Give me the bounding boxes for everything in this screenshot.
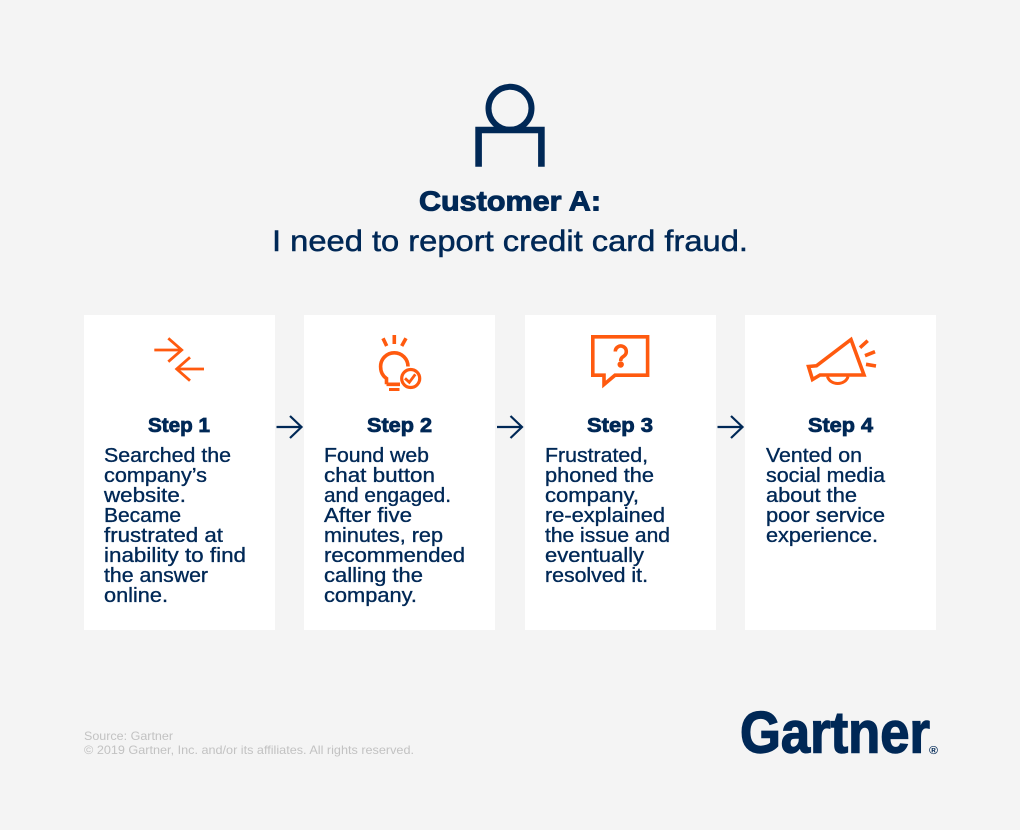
icon: megaphone <box>808 340 876 384</box>
step 4 heading: Step 4 <box>808 415 874 437</box>
step 2 heading: Step 2 <box>367 415 432 437</box>
icon: customer person <box>479 87 541 167</box>
step 1 description: Became <box>104 505 181 527</box>
step 1 description <box>103 445 246 607</box>
Gartner logo: ® <box>929 745 938 757</box>
step 2 description: minutes, rep <box>324 525 443 547</box>
step 3 description: resolved it. <box>545 565 648 587</box>
step 4 description <box>766 445 886 547</box>
source and copyright: © 2019 Gartner, Inc. and/or its affiliates. All rights reserved. <box>84 743 414 757</box>
step 4 description: social media <box>766 465 886 487</box>
arrow: step 3 to step 4 <box>718 416 742 438</box>
step 2 description: chat button <box>324 465 435 487</box>
step 1 description: company’s <box>104 465 207 487</box>
panel: step 2 <box>304 315 495 630</box>
step 4 description: poor service <box>766 505 885 527</box>
panel: step 4 <box>745 315 936 630</box>
step 2 description: and engaged. <box>324 485 451 507</box>
step 3 description: eventually <box>545 545 644 567</box>
step 2 description <box>324 445 465 607</box>
step 1 description: online. <box>104 585 168 607</box>
step 1 description: website. <box>103 485 186 507</box>
subheading: customer need: I need to report credit card fraud. <box>272 225 748 258</box>
arrow: step 2 to step 3 <box>497 416 522 438</box>
step 3 description: the issue and <box>545 525 670 547</box>
step 3 description: Frustrated, <box>545 445 648 467</box>
step 4 description: Vented on <box>766 445 862 467</box>
heading: customer A: Customer A: <box>419 186 601 216</box>
step 2 description: recommended <box>324 545 465 567</box>
step 4 description: about the <box>766 485 857 507</box>
step 3 heading: Step 3 <box>587 415 653 437</box>
arrow: step 1 to step 2 <box>276 416 302 438</box>
step 2 description: Found web <box>324 445 429 467</box>
step 3 description <box>545 445 670 587</box>
step 1 description: Searched the <box>104 445 231 467</box>
icon: speech bubble with question mark <box>593 337 648 384</box>
source and copyright: Source: Gartner <box>84 729 173 743</box>
panel: step 1 <box>84 315 275 630</box>
step 1 description: the answer <box>104 565 208 587</box>
step 2 description: After five <box>324 505 412 527</box>
step 3 description: company, <box>545 485 639 507</box>
step 1 description: inability to find <box>104 545 246 567</box>
icon: light bulb with check <box>381 335 420 390</box>
panel: step 3 <box>525 315 716 630</box>
step 1 description: frustrated at <box>104 525 223 547</box>
step 3 description: re-explained <box>545 505 665 527</box>
step 3 description: phoned the <box>545 465 654 487</box>
step 2 description: company. <box>324 585 417 607</box>
step 2 description: calling the <box>324 565 423 587</box>
Gartner logo: Gartner <box>740 700 930 766</box>
step 1 heading: Step 1 <box>148 415 210 437</box>
step 4 description: experience. <box>766 525 878 547</box>
icon: opposing arrows <box>154 338 204 381</box>
source and copyright <box>84 729 414 757</box>
